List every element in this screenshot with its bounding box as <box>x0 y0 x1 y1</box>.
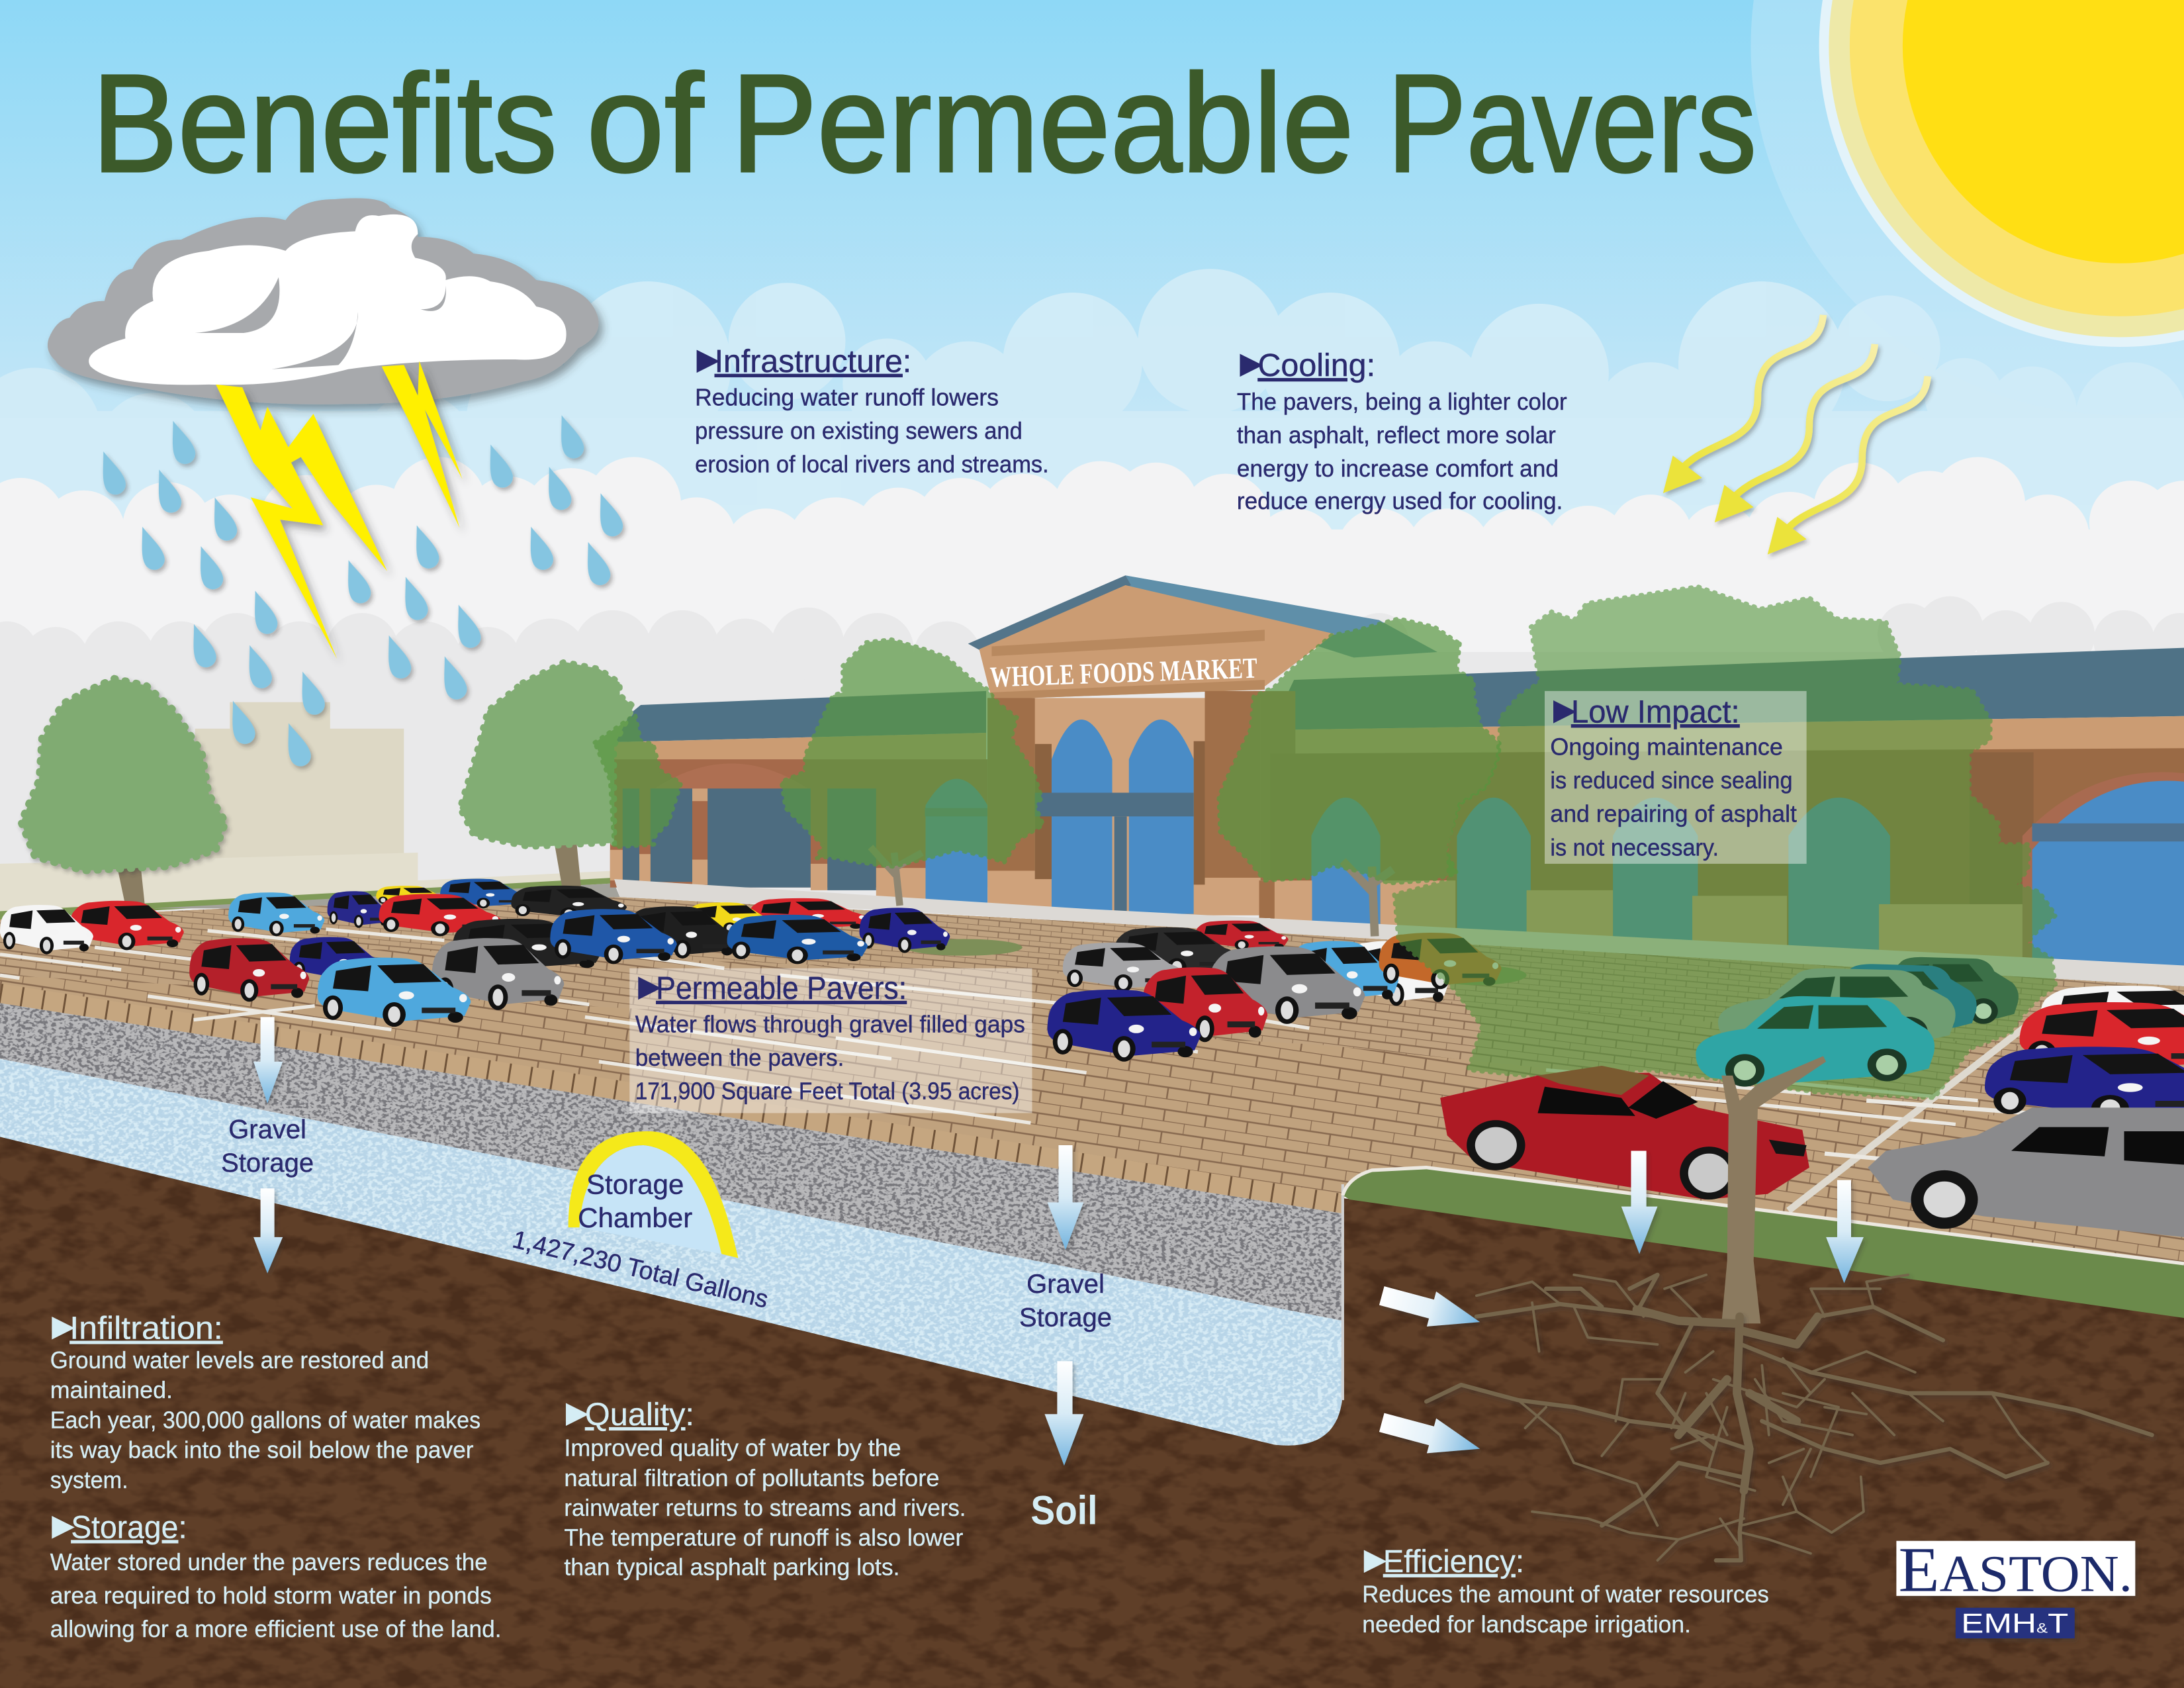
tree canopy overlays <box>595 618 1500 883</box>
sky background <box>0 0 2184 418</box>
arrow: curb left <box>1621 1150 1657 1254</box>
ray arrow 2 <box>1715 344 1875 522</box>
text block: quality: Quality <box>585 1397 686 1432</box>
panel: permeable pavers: Permeable Pavers: <box>656 970 907 1006</box>
text block: cooling: Cooling <box>1257 348 1367 383</box>
label: gravel storage left: Storage <box>221 1149 314 1178</box>
logo: EMH&T wordmark: EMH &T <box>1961 1608 2068 1639</box>
cloud white front <box>89 214 567 385</box>
cars: centre rows <box>1048 921 1502 1062</box>
panel: low impact: Ongoing maintenance <box>1550 734 1783 761</box>
title <box>92 45 1756 201</box>
text block: cooling <box>1233 343 1567 514</box>
text block: efficiency: : <box>1516 1544 1524 1579</box>
cars: far right behind curb <box>1985 986 2184 1121</box>
building: right wing <box>1253 648 2184 989</box>
bolt: small <box>382 361 463 528</box>
canopy: large right tree over lot <box>1394 586 2056 1098</box>
ray arrow 3 <box>1768 376 1928 555</box>
text block: storage: area required to hold storm water in ponds <box>50 1582 492 1609</box>
text block: efficiency: ► <box>1357 1539 1394 1581</box>
distant beige ground <box>0 853 614 919</box>
panel: permeable pavers: 171,900 Square Feet Total (3.95 acres) <box>635 1078 1020 1105</box>
text block: storage: Storage <box>71 1510 178 1546</box>
arrow: left lower <box>253 1188 283 1274</box>
ground horizon strip <box>0 878 620 919</box>
text block: infrastructure: Reducing water runoff lowers <box>695 384 999 410</box>
panel: permeable pavers: between the pavers. <box>635 1045 844 1071</box>
rain drops <box>93 412 626 769</box>
ray arrow 1 <box>1663 315 1823 493</box>
panel: low impact: is not necessary. <box>1550 834 1719 861</box>
text block: efficiency: needed for landscape irrigation. <box>1362 1611 1691 1638</box>
text block: infrastructure: ► <box>690 339 727 381</box>
title: Permeable <box>731 45 1354 201</box>
label: total gallons: 1,427,230 Total Gallons <box>510 1226 771 1314</box>
label: storage chamber: Storage <box>586 1169 684 1200</box>
cars: front left rows <box>189 937 564 1027</box>
text block: infiltration: Each year, 300,000 gallons of water makes <box>50 1407 480 1433</box>
text block: quality <box>559 1392 966 1581</box>
text block: quality: : <box>685 1397 694 1432</box>
text block: efficiency: Reduces the amount of water resources <box>1362 1581 1769 1607</box>
paved parking lot <box>0 897 2184 1264</box>
soil <box>0 1087 2184 1688</box>
building: left wing <box>595 691 987 903</box>
text block: storage: ► <box>44 1505 82 1547</box>
store sign: WHOLE FOODS MARKET <box>989 652 1258 694</box>
parking stall lines <box>0 929 2048 1211</box>
title: of <box>586 45 704 201</box>
distant beige building <box>195 702 404 906</box>
text block: cooling: ► <box>1233 343 1270 385</box>
panel: low impact: ► <box>1546 689 1583 731</box>
landscape island <box>1426 966 1527 985</box>
text block: infrastructure <box>690 339 1049 477</box>
water filled gravel layer <box>0 1052 1351 1456</box>
title: Pavers <box>1387 45 1756 201</box>
arrow: left upper <box>253 1017 283 1103</box>
clouds: white band <box>0 457 2184 947</box>
text block: infiltration <box>44 1306 480 1493</box>
text block: storage <box>44 1505 502 1642</box>
text block: storage: Water stored under the pavers reduces the <box>50 1549 488 1575</box>
text block: quality: ► <box>559 1392 596 1434</box>
tree trunk <box>1721 1056 1826 1323</box>
green curb strip <box>1343 1168 2184 1318</box>
text block: cooling: The pavers, being a lighter color <box>1237 389 1567 415</box>
label: gravel storage centre: Gravel <box>1026 1270 1105 1299</box>
sidewalk <box>614 879 2184 986</box>
text block: cooling: energy to increase comfort and <box>1237 455 1559 482</box>
text block: quality: The temperature of runoff is also lower <box>564 1524 963 1551</box>
text block: quality: rainwater returns to streams and rivers. <box>564 1495 966 1521</box>
clouds: grey band <box>0 596 2184 931</box>
text block: infiltration: ► <box>44 1306 82 1348</box>
cloud grey back <box>48 198 599 404</box>
text block: quality: than typical asphalt parking lots. <box>564 1554 900 1581</box>
bolt: large <box>216 385 387 659</box>
storm cloud <box>48 198 599 404</box>
gravel storage layer <box>0 996 1351 1331</box>
tree trunks behind cars <box>870 847 1393 936</box>
panel: low impact <box>1545 689 1807 864</box>
text block: infrastructure: : <box>903 344 911 379</box>
arrow: sideways lower <box>1377 1405 1484 1466</box>
text block: quality: Improved quality of water by the <box>564 1434 901 1461</box>
text block: infrastructure: erosion of local rivers and streams. <box>695 451 1049 477</box>
logo: Easton wordmark: EASTON. <box>1899 1534 2132 1605</box>
text block: infrastructure: pressure on existing sewers and <box>695 418 1023 444</box>
canopy: centre left tree over wing end <box>595 715 681 847</box>
text block: storage: : <box>178 1510 187 1546</box>
label: gravel storage centre: Storage <box>1019 1303 1112 1333</box>
tree: centre left <box>460 662 634 899</box>
text block: infiltration: Infiltration: <box>69 1311 223 1346</box>
tree: left <box>21 679 226 906</box>
logo: Easton EMH&T <box>1896 1534 2135 1639</box>
text block: efficiency: Efficiency <box>1383 1544 1516 1579</box>
clouds: light blue band <box>0 269 2184 648</box>
text block: infiltration: Ground water levels are restored and <box>50 1347 429 1374</box>
sun <box>1751 0 2184 415</box>
arrow: centre upper <box>1048 1145 1083 1250</box>
panel: low impact: is reduced since sealing <box>1550 767 1793 794</box>
cloud shading <box>195 277 446 369</box>
panel: permeable pavers: Water flows through gravel filled gaps <box>635 1011 1025 1038</box>
cars: right rows under canopy <box>1696 957 2019 1087</box>
arrow: centre lower <box>1044 1361 1083 1466</box>
text block: storage: allowing for a more efficient use of the land. <box>50 1616 502 1642</box>
text block: infrastructure: Infrastructure <box>715 344 903 379</box>
label: soil: Soil <box>1030 1487 1097 1532</box>
text block: infiltration: maintained. <box>50 1377 173 1403</box>
lightning bolts <box>216 361 463 659</box>
panel: permeable pavers <box>629 966 1032 1113</box>
label: gravel storage left: Gravel <box>228 1115 306 1145</box>
car: red coupe in foreground <box>1440 1066 1809 1199</box>
panel: low impact: and repairing of asphalt <box>1550 801 1797 827</box>
storage chamber arch <box>569 1131 738 1258</box>
text block: infiltration: system. <box>50 1467 128 1493</box>
title: Benefits <box>92 45 557 201</box>
text block: efficiency <box>1357 1539 1769 1638</box>
arrow: sideways upper <box>1377 1278 1484 1340</box>
text block: quality: natural filtration of pollutants before <box>564 1465 940 1491</box>
car: grey sedan in foreground <box>1868 1107 2184 1237</box>
arrow: curb right <box>1826 1180 1864 1283</box>
label: storage chamber: Chamber <box>578 1202 692 1233</box>
tree roots <box>1426 1275 2152 1560</box>
text block: cooling: reduce energy used for cooling. <box>1237 488 1563 514</box>
text block: infiltration: its way back into the soil below the paver <box>50 1437 474 1464</box>
building: centre pavilion <box>968 575 1437 918</box>
canopy: near store right <box>1219 618 1500 883</box>
text block: cooling: : <box>1367 348 1375 383</box>
panel: permeable pavers: ► <box>631 966 668 1008</box>
cars: back rows <box>0 878 950 971</box>
canopy: near centre left <box>782 639 1043 867</box>
panel: low impact: Low Impact: <box>1571 694 1740 729</box>
arrows: water flow <box>253 1017 1864 1466</box>
sun ray arrows <box>1663 315 1928 555</box>
text block: cooling: than asphalt, reflect more solar <box>1237 422 1556 448</box>
